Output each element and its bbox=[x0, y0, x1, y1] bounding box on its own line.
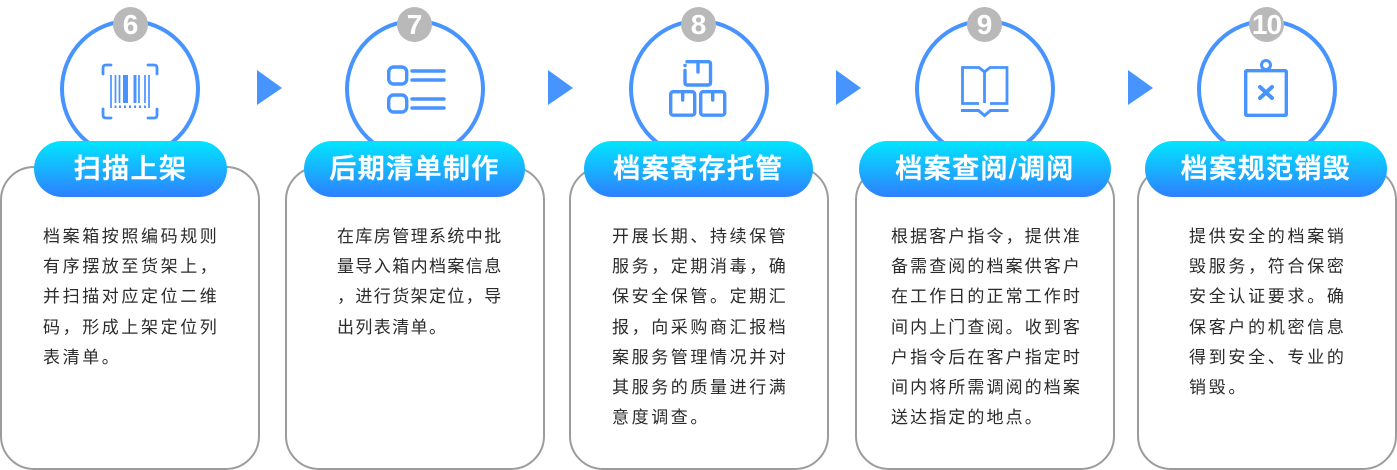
text: step 10 description: 保客户的机密信息 bbox=[1189, 318, 1347, 337]
number badge 7: 7 bbox=[407, 9, 422, 40]
text: step 10 description bbox=[1189, 227, 1347, 397]
text: step 10 description: 安全认证要求。确 bbox=[1189, 287, 1347, 306]
circle: step 10 ring bbox=[1197, 19, 1337, 159]
panel: step 8 card bbox=[569, 166, 829, 470]
text: step 9 description: 根据客户指令，提供准 bbox=[891, 227, 1082, 246]
text: step 6 description: 表清单。 bbox=[43, 348, 121, 367]
text: step 7 description bbox=[337, 227, 503, 337]
heading: 档案查阅/调阅: 档案查阅/调阅 bbox=[895, 154, 1075, 184]
circle: step 9 ring bbox=[915, 19, 1055, 159]
text: step 9 description: 户指令后在客户指定时 bbox=[891, 348, 1082, 367]
arrow 4 bbox=[1128, 70, 1153, 105]
icon: clipboard with cross bbox=[1244, 59, 1288, 117]
text: step 10 description: 毁服务，符合保密 bbox=[1189, 257, 1347, 276]
heading: 扫描上架 bbox=[34, 141, 227, 197]
icon: stacked boxes bbox=[669, 60, 726, 117]
text: step 7 description: 出列表清单。 bbox=[337, 318, 447, 337]
number badge 10: 10 bbox=[1252, 9, 1281, 40]
heading: 档案规范销毁 bbox=[1145, 141, 1387, 197]
icon: open book bbox=[961, 66, 1008, 118]
step 7: post-inventory list bbox=[285, 7, 545, 470]
text: step 8 description: 案服务管理情况并对 bbox=[612, 348, 788, 367]
arrow 3 bbox=[836, 70, 861, 105]
number badge 6: 6 bbox=[123, 9, 138, 40]
text: step 6 description bbox=[43, 227, 219, 367]
text: step 8 description: 服务，定期消毒，确 bbox=[612, 257, 788, 276]
text: step 8 description: 其服务的质量进行满 bbox=[612, 378, 788, 397]
text: step 8 description: 保安全保管。定期汇 bbox=[612, 287, 788, 306]
heading: 后期清单制作 bbox=[304, 141, 525, 197]
circle: step 8 ring bbox=[629, 19, 769, 159]
step 8: storage and custody bbox=[569, 7, 829, 470]
number badge 6 bbox=[113, 7, 148, 42]
step 10: compliant destruction bbox=[1137, 7, 1397, 470]
text: step 9 description: 间内将所需调阅的档案 bbox=[891, 378, 1082, 397]
text: step 8 description: 意度调查。 bbox=[612, 408, 710, 427]
panel: step 6 card bbox=[0, 166, 260, 470]
text: step 10 description: 得到安全、专业的 bbox=[1189, 348, 1347, 367]
text: step 6 description: 档案箱按照编码规则 bbox=[43, 227, 219, 246]
heading: 后期清单制作: 后期清单制作 bbox=[329, 154, 500, 184]
icon: checklist bbox=[387, 65, 446, 114]
text: step 6 description: 并扫描对应定位二维 bbox=[43, 287, 219, 306]
arrow 2 bbox=[548, 70, 573, 105]
text: step 8 description bbox=[612, 227, 788, 427]
step 6: scan and shelve bbox=[0, 7, 260, 470]
icon: barcode bbox=[102, 64, 158, 120]
panel: step 9 card bbox=[855, 166, 1115, 470]
number badge 9: 9 bbox=[977, 9, 992, 40]
text: step 6 description: 有序摆放至货架上， bbox=[43, 257, 219, 276]
number badge 7 bbox=[397, 7, 432, 42]
circle: step 7 ring bbox=[345, 19, 485, 159]
panel: step 10 card bbox=[1137, 166, 1397, 470]
step 9: access and retrieval bbox=[855, 7, 1115, 470]
text: step 9 description: 在工作日的正常工作时 bbox=[891, 287, 1082, 306]
circle: step 6 ring bbox=[60, 19, 200, 159]
text: step 6 description: 码，形成上架定位列 bbox=[43, 318, 219, 337]
text: step 7 description: 在库房管理系统中批 bbox=[337, 227, 503, 246]
text: step 7 description: 量导入箱内档案信息 bbox=[337, 257, 503, 276]
number badge 8 bbox=[681, 7, 716, 42]
text: step 9 description bbox=[891, 227, 1082, 427]
text: step 9 description: 备需查阅的档案供客户 bbox=[891, 257, 1082, 276]
text: step 10 description: 提供安全的档案销 bbox=[1189, 227, 1347, 246]
heading: 扫描上架: 扫描上架 bbox=[74, 154, 187, 184]
text: step 10 description: 销毁。 bbox=[1189, 378, 1248, 397]
number badge 9 bbox=[967, 7, 1002, 42]
arrow 1 bbox=[257, 70, 282, 105]
text: step 8 description: 开展长期、持续保管 bbox=[612, 227, 788, 246]
text: step 7 description: ，进行货架定位，导 bbox=[337, 287, 503, 306]
text: step 9 description: 送达指定的地点。 bbox=[891, 408, 1044, 427]
heading: 档案查阅/调阅 bbox=[859, 141, 1111, 197]
heading: 档案规范销毁: 档案规范销毁 bbox=[1181, 154, 1351, 184]
heading: 档案寄存托管 bbox=[584, 141, 813, 197]
text: step 9 description: 间内上门查阅。收到客 bbox=[891, 318, 1082, 337]
number badge 8: 8 bbox=[691, 9, 706, 40]
heading: 档案寄存托管: 档案寄存托管 bbox=[613, 154, 784, 184]
panel: step 7 card bbox=[285, 166, 545, 470]
text: step 8 description: 报，向采购商汇报档 bbox=[612, 318, 788, 337]
